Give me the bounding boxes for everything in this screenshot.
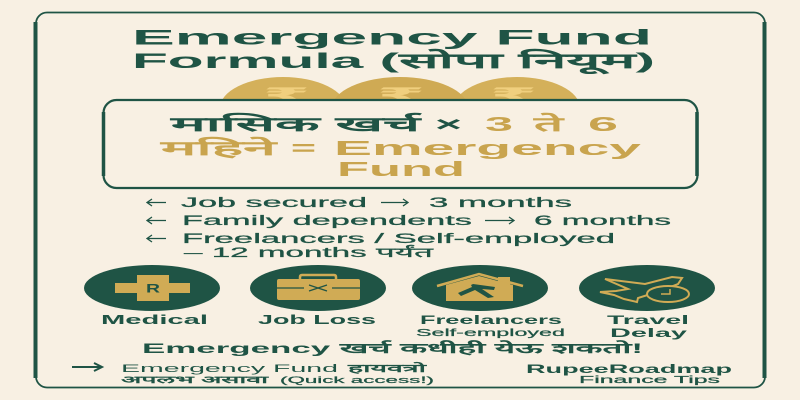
icon: briefcase [250,265,386,311]
rule: family dependents: 6 months [534,213,672,228]
formula line 1: 3 [485,114,513,136]
title: Formula (सोपा नियूम) [132,48,655,75]
icon: medical [84,265,220,311]
icon: medical: R [146,282,161,296]
label: medical: Medical [101,313,208,327]
rule: job secured: 3 months [429,195,573,210]
title [132,26,655,75]
coins: ₹ [490,85,537,107]
rules list [147,195,672,260]
brand: Finance Tips [579,375,720,386]
formula line 1: 6 [588,114,618,136]
coins: ₹ [263,85,310,107]
formula line 1 [168,112,618,136]
coins: ₹ [377,85,425,107]
rule: family dependents: Family dependents [182,213,473,228]
formula line 2: महिने [158,136,279,160]
formula line 1: ते [531,112,567,136]
rule: job secured [147,195,573,210]
label: self-employed: Self-employed [416,327,565,339]
rule: job secured: Job secured [181,195,367,210]
footer note: (Quick access!) [280,375,434,386]
footer note: Emergency Fund [121,363,338,375]
formula line 1: × [435,114,462,136]
rule: freelancers: Freelancers / Self-employed [182,231,615,246]
coins [220,77,580,139]
formula line 3: Fund [337,159,465,181]
formula box [104,100,698,188]
label: job loss: Job Loss [258,313,376,327]
emergency statement: Emergency खर्च कधीही येऊ शकतो! [142,340,643,356]
formula line 1: मासिक खर्च [168,112,424,136]
rule: family dependents [147,213,672,228]
rule: freelancers continued: – 12 months पर्यंत [184,244,434,260]
icon: plane with clock [579,265,715,311]
title: Emergency Fund [132,26,652,50]
label: travel delay [607,313,689,340]
footer note [121,361,434,386]
footer note: हायवत्रो [345,361,429,375]
icon labels [101,313,689,340]
formula line 2 [158,136,643,160]
rule: freelancers [147,231,615,246]
brand [526,364,732,386]
icon: house [412,265,548,311]
formula line 2: Emergency [334,138,643,160]
brand: RupeeRoadmap [526,364,732,376]
label: travel delay: Delay [610,326,688,340]
formula line 2: = [291,138,316,160]
footer note: अपलभ असावा [121,375,269,386]
label: travel delay: Travel [607,313,689,327]
arrow [72,363,102,371]
label: freelancers: Freelancers [420,313,563,327]
